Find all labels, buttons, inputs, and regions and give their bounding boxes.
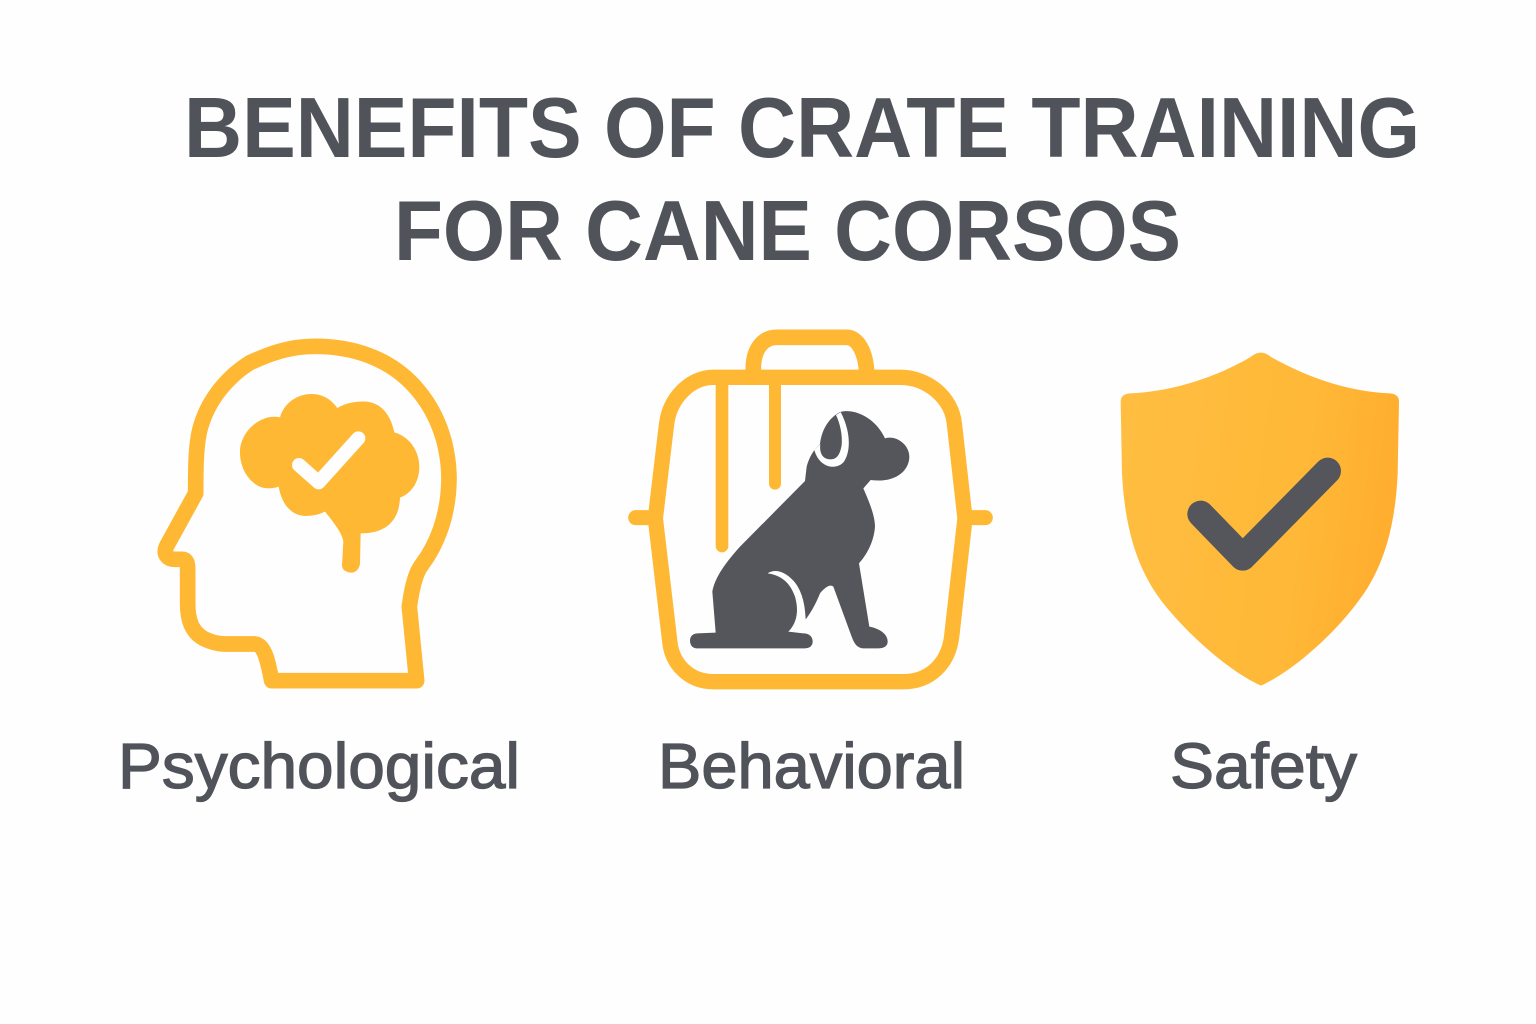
crate side latch right [967, 495, 985, 540]
crate body [655, 377, 965, 682]
crate bar short [757, 382, 793, 484]
panel: behavioral [636, 337, 985, 802]
label: Safety: Safety [1170, 730, 1357, 802]
brain check mark [299, 438, 358, 482]
label: Psychological: Psychological [118, 730, 520, 802]
shield [1121, 353, 1399, 686]
icon: shield with check [1121, 353, 1399, 686]
dog ear outline [814, 412, 849, 467]
panel: safety [1121, 353, 1399, 802]
brain [240, 394, 419, 573]
dog silhouette [690, 411, 909, 648]
panel: psychological [118, 346, 520, 802]
head outline [165, 346, 449, 681]
label: Behavioral: Behavioral [658, 730, 965, 802]
shield check mark [1201, 471, 1328, 557]
title line 2: FOR CANE CORSOS [394, 184, 1181, 279]
icon: head with brain and check [165, 346, 449, 681]
crate bar long [703, 382, 741, 546]
icon: crate with dog [636, 337, 985, 682]
crate handle [753, 337, 867, 373]
title line 1: BENEFITS OF CRATE TRAINING [184, 81, 1420, 176]
title [184, 81, 1420, 279]
crate side latch left [636, 495, 653, 540]
